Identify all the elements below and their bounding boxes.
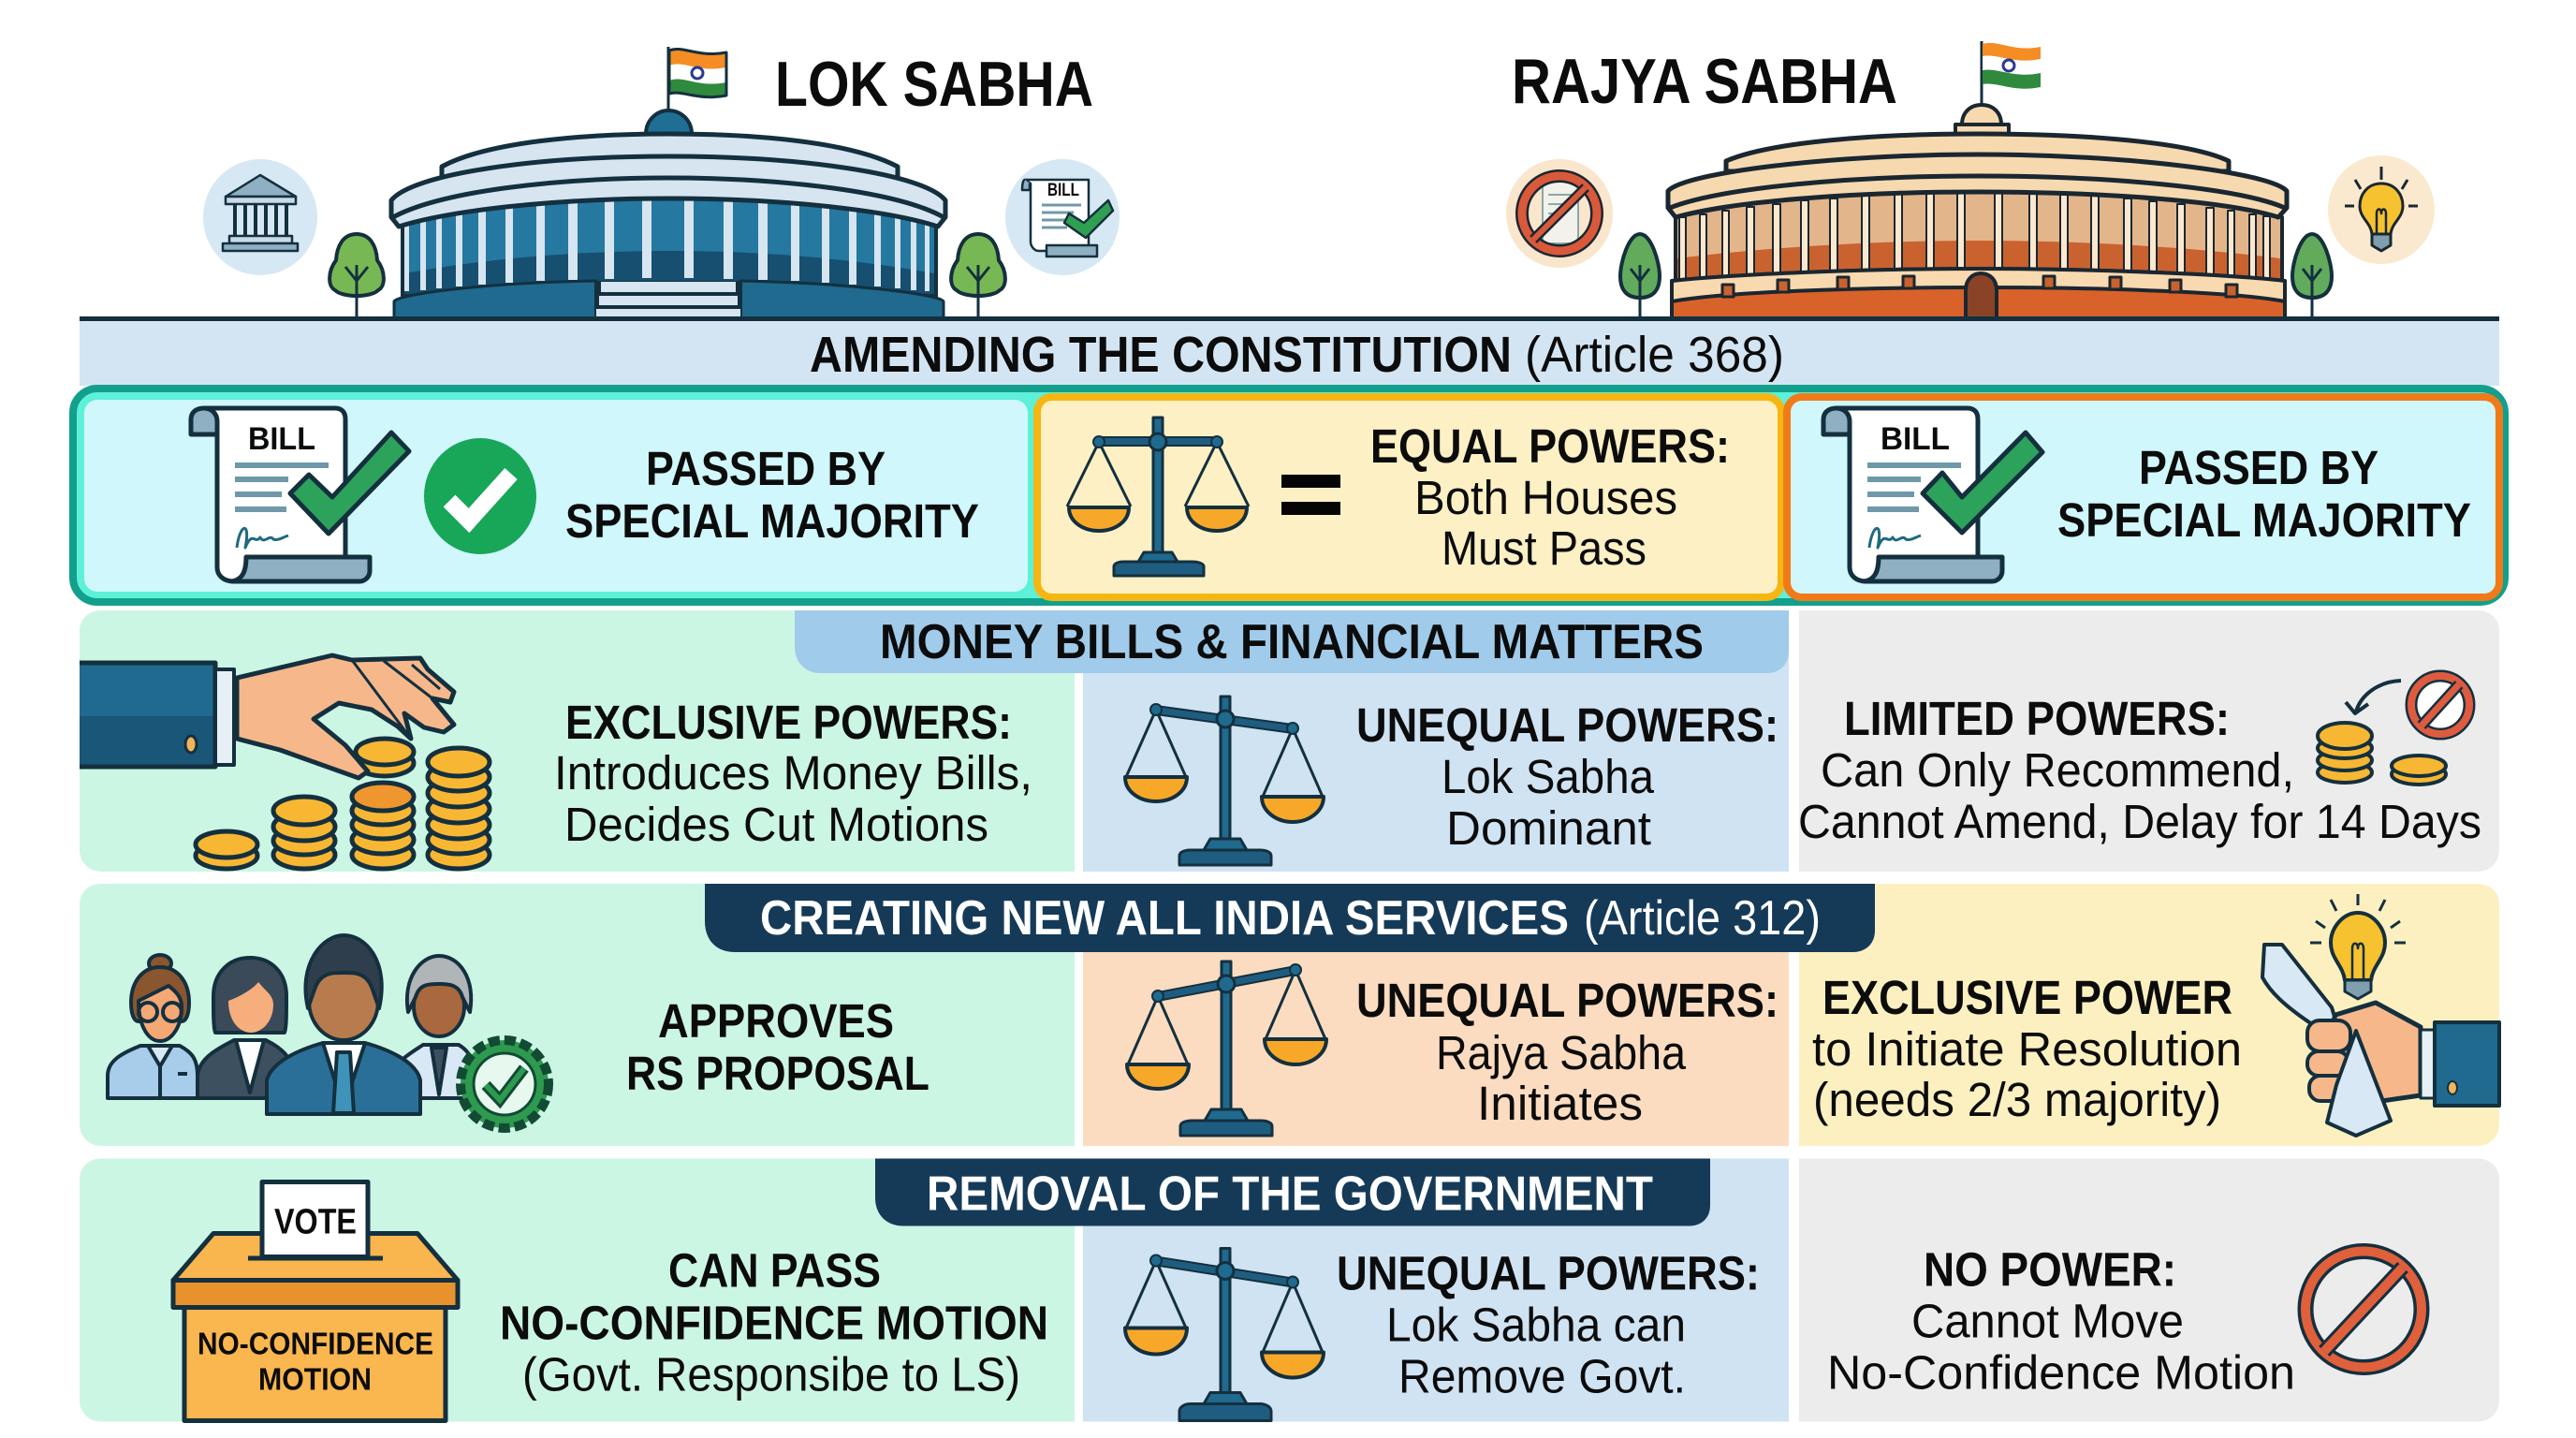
text: passed by special majority: SPECIAL MAJORITY [565, 494, 979, 548]
section header band: amending the constitution [80, 320, 2499, 386]
icon: hand with resolution and bulb [2262, 894, 2499, 1136]
heading tab: all india services: CREATING NEW ALL INDIA SERVICES [760, 891, 1569, 946]
icon: hand placing coins [80, 655, 454, 778]
panel: lok sabha amending [84, 400, 1028, 592]
text: exclusive power: EXCLUSIVE POWER [1822, 971, 2232, 1024]
panel: rajya sabha amending [1787, 397, 2499, 597]
text: can pass no-confidence motion: NO-CONFIDENCE MOTION [500, 1296, 1048, 1350]
icon: rajya sabha flag [1982, 41, 2041, 107]
text: can pass no-confidence motion: CAN PASS [668, 1243, 881, 1298]
icon: green approval seal [461, 1040, 549, 1128]
rajya sabha title: RAJYA SABHA [1512, 46, 1897, 117]
panel: all india services unequal powers [1083, 884, 1789, 1146]
text: exclusive power [1812, 971, 2242, 1126]
icon: no bill sign badge [1506, 159, 1613, 268]
icon: no-confidence ballot box: MOTION [258, 1361, 372, 1397]
icon: bill with check [1823, 408, 2042, 581]
text: unequal powers: Dominant [1446, 801, 1651, 855]
icon: scale tilted to lok sabha [1125, 697, 1324, 865]
text: approves rs proposal [626, 994, 929, 1100]
text: no power [1827, 1243, 2295, 1399]
heading: amending the constitution: (Article 368) [1525, 327, 1784, 383]
icon: bill with check: BILL [248, 421, 315, 457]
lok sabha title: LOK SABHA [775, 49, 1093, 120]
icon: green check circle [424, 438, 536, 554]
panel: amending row frame [73, 389, 2505, 602]
heading tab: all india services: (Article 312) [1584, 891, 1821, 946]
panel: removal of government rajya sabha [1799, 1159, 2499, 1421]
text: passed by special majority [2057, 441, 2471, 547]
text: exclusive powers [554, 696, 1032, 851]
icon: classical building badge [203, 159, 317, 275]
ground line [80, 316, 2499, 321]
text: equal powers [1370, 419, 1730, 575]
panel: money bills unequal powers [1083, 610, 1789, 872]
text: unequal powers [1356, 698, 1778, 855]
text: exclusive powers: EXCLUSIVE POWERS: [565, 696, 1012, 749]
text: unequal powers: Lok Sabha [1442, 750, 1655, 803]
icon: bill with check badge [1005, 159, 1120, 275]
text: equal powers: EQUAL POWERS: [1370, 419, 1730, 473]
icon: equals sign [1281, 475, 1340, 515]
panel: money bills rajya sabha [1798, 610, 2499, 872]
text: unequal powers: Initiates [1477, 1077, 1643, 1130]
text: unequal powers: Lok Sabha can [1386, 1298, 1686, 1352]
icon: officials group [108, 935, 476, 1114]
text: exclusive power: (needs 2/3 majority) [1813, 1073, 2221, 1126]
text: approves rs proposal: RS PROPOSAL [626, 1047, 929, 1100]
icon: bill with check [191, 408, 409, 581]
text: exclusive powers: Introduces Money Bills, [554, 746, 1032, 800]
icon: coins with no sign and arrow [2318, 676, 2469, 785]
text: equal powers: Both Houses [1414, 471, 1677, 524]
icon: bill with check badge: BILL [1047, 181, 1079, 200]
text: approves rs proposal: APPROVES [658, 994, 894, 1048]
icon: no-confidence ballot box: VOTE [274, 1202, 357, 1241]
panel: all india services lok sabha [80, 884, 1075, 1146]
icon: no sign [2305, 1251, 2422, 1367]
text: unequal powers: Remove Govt. [1398, 1350, 1686, 1402]
text: unequal powers: UNEQUAL POWERS: [1356, 974, 1778, 1027]
icon: lok sabha parliament building [391, 110, 945, 318]
panel: money bills lok sabha [80, 610, 1075, 872]
panel: all india services rajya sabha [1799, 884, 2499, 1146]
text: passed by special majority: PASSED BY [646, 442, 886, 495]
heading tab: money bills: MONEY BILLS & FINANCIAL MATTERS [880, 615, 1704, 669]
text: no power: No-Confidence Motion [1827, 1346, 2295, 1399]
text: exclusive powers: Decides Cut Motions [564, 798, 988, 851]
text: can pass no-confidence motion [500, 1243, 1048, 1401]
text: unequal powers: Rajya Sabha [1436, 1026, 1687, 1079]
icon: trees [329, 234, 2332, 318]
text: unequal powers: UNEQUAL POWERS: [1356, 698, 1778, 752]
text: unequal powers: UNEQUAL POWERS: [1337, 1247, 1760, 1299]
text: unequal powers [1337, 1247, 1760, 1402]
text: no power: Cannot Move [1911, 1294, 2184, 1348]
icon: no-confidence ballot box: NO-CONFIDENCE [198, 1326, 433, 1361]
icon: no-confidence ballot box [173, 1181, 458, 1421]
text: passed by special majority [565, 442, 979, 548]
text: passed by special majority: SPECIAL MAJORITY [2057, 493, 2471, 547]
text: limited powers: LIMITED POWERS: [1844, 692, 2230, 745]
text: no power: NO POWER: [1924, 1243, 2176, 1296]
icon: rajya sabha parliament building [1668, 105, 2287, 318]
icon: balanced scale [1067, 418, 1249, 576]
text: limited powers: Can Only Recommend, [1821, 743, 2294, 797]
heading tab: all india services [705, 884, 1875, 952]
panel: equal powers [1037, 397, 1781, 597]
heading tab: removal of the government: REMOVAL OF THE GOVERNMENT [927, 1167, 1653, 1221]
text: can pass no-confidence motion: (Govt. Responsibe to LS) [522, 1348, 1020, 1401]
panel: removal of government unequal powers [1083, 1159, 1789, 1421]
icon: light bulb badge [2328, 155, 2435, 264]
heading: amending the constitution: AMENDING THE CONSTITUTION [810, 327, 1512, 383]
icon: coin stacks [196, 748, 490, 869]
icon: lok sabha flag [668, 47, 726, 112]
text: unequal powers [1356, 974, 1778, 1130]
icon: scale tilted to rajya sabha [1127, 961, 1326, 1136]
text: limited powers: Cannot Amend, Delay for 14 Days [1798, 795, 2481, 848]
icon: scale tilted to lok sabha [1125, 1249, 1324, 1421]
text: exclusive power: to Initiate Resolution [1812, 1022, 2242, 1076]
text: limited powers [1798, 692, 2481, 848]
icon: bill with check: BILL [1881, 421, 1950, 457]
panel: removal of government lok sabha [80, 1159, 1075, 1421]
text: passed by special majority: PASSED BY [2139, 441, 2378, 494]
text: equal powers: Must Pass [1442, 521, 1647, 575]
